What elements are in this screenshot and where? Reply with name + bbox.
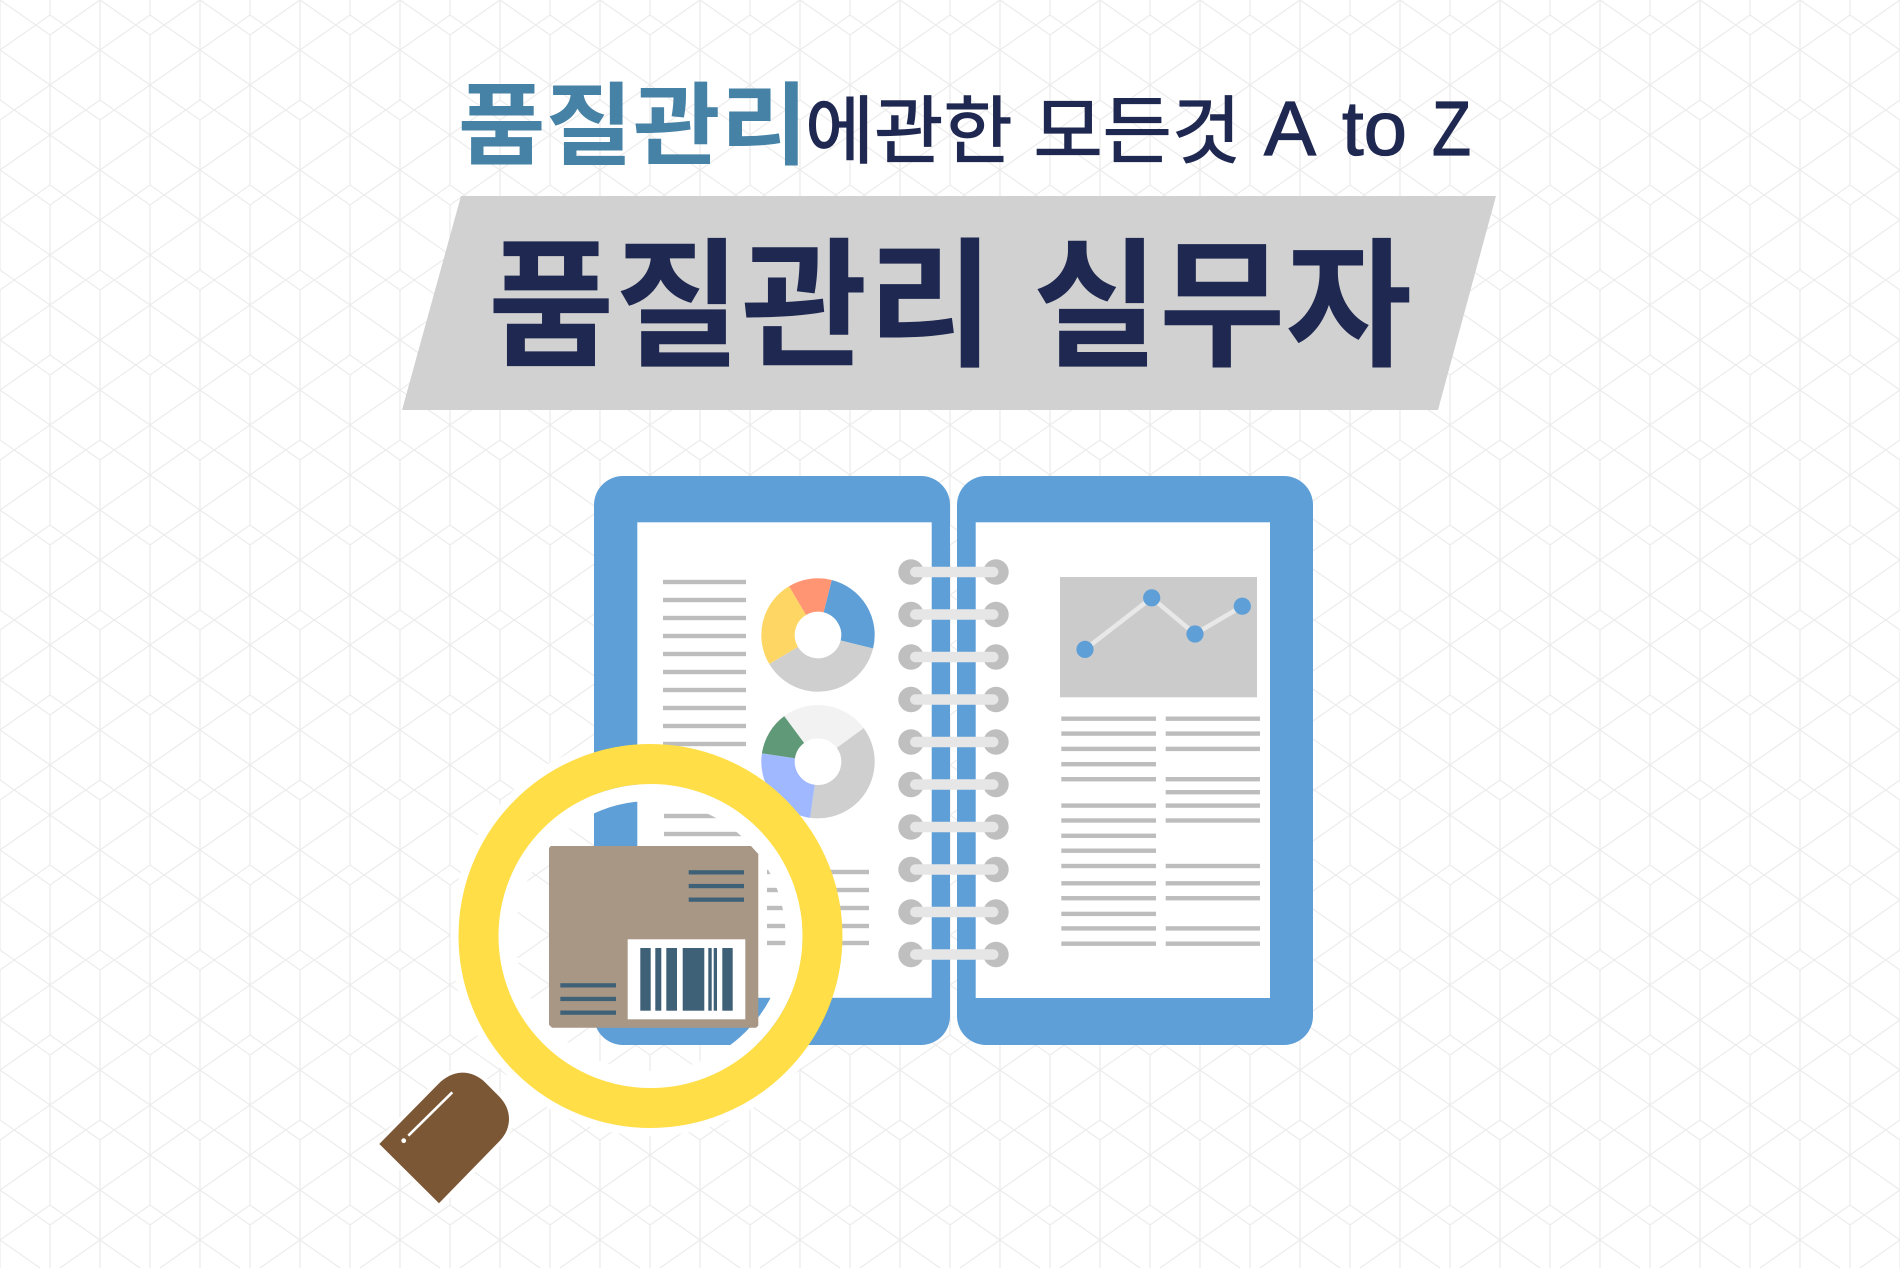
banner — [402, 194, 1496, 410]
donut chart 1 — [763, 580, 873, 690]
address lines top — [689, 870, 744, 902]
barcode label — [628, 939, 745, 1019]
title rest: 에관한 모든것: 에관한 모든것 — [805, 72, 1241, 179]
right page — [976, 522, 1270, 998]
parcel box with barcode — [549, 846, 758, 1028]
title line — [458, 53, 1471, 183]
right page text column 2 — [1166, 716, 1260, 946]
lens yellow ring — [478, 764, 822, 1108]
magnifying glass — [379, 764, 822, 1203]
handle — [379, 1073, 509, 1203]
banner text: 품질관리 실무자 — [488, 194, 1412, 396]
banner background — [402, 196, 1496, 410]
address lines bottom — [560, 983, 616, 1015]
lens white band — [507, 792, 794, 1080]
line chart — [1060, 577, 1257, 697]
title rest: A to Z: to — [1342, 86, 1407, 172]
title rest: A to Z: Z — [1432, 86, 1471, 172]
title highlight: 품질관리: 품질관리 — [458, 53, 808, 183]
donut chart 2 — [762, 706, 874, 818]
right page text column 1 — [1061, 716, 1156, 946]
spiral binding rings — [898, 559, 1009, 967]
left page text lines — [663, 580, 869, 945]
title rest: A to Z: A — [1264, 86, 1317, 172]
box body — [549, 846, 758, 1028]
title rest: A to Z — [1264, 86, 1471, 172]
right cover — [957, 476, 1313, 1045]
magnifier white halo — [379, 736, 851, 1203]
notebook — [594, 476, 1313, 1045]
left cover — [594, 476, 950, 1045]
left page — [637, 522, 932, 998]
